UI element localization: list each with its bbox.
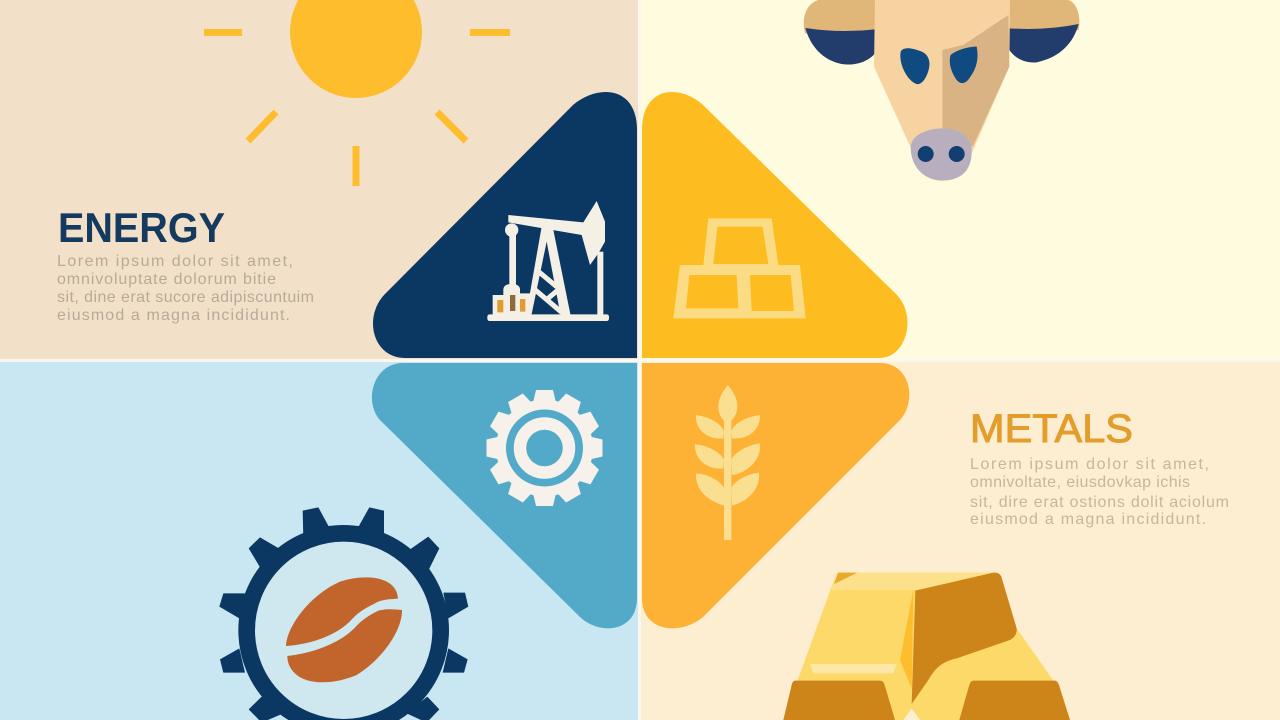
icon: oil pump — [487, 201, 609, 321]
icon: white gear — [486, 390, 602, 506]
heading: metals: METALS — [970, 407, 1133, 451]
panel: navy triangle with oil pump — [373, 92, 637, 358]
icon: outlined gold bars — [673, 218, 806, 318]
text block: metals description: sit, dire erat ostions dolit aciolum — [970, 494, 1229, 511]
panel: energy background — [0, 0, 638, 359]
heading: energy: ENERGY — [58, 204, 225, 251]
gear — [219, 507, 468, 720]
text block: energy description: sit, dine erat sucore adipiscuntuim — [57, 289, 314, 306]
text block: metals description — [970, 456, 1229, 528]
icon: coffee gear — [219, 507, 468, 720]
text block: metals description: eiusmod a magna incididunt. — [970, 511, 1206, 528]
icon: sun — [204, 0, 510, 186]
eyes — [900, 48, 930, 84]
text block: energy description: omnivoluptate dolorum bitie — [57, 271, 276, 288]
panel: livestock background — [641, 0, 1280, 359]
panel: yellow triangle with gold bars — [642, 92, 907, 358]
panel: metals background — [641, 362, 1280, 720]
head — [874, 0, 1010, 153]
coffee bean — [286, 577, 402, 682]
panel: orange triangle with wheat — [642, 363, 909, 628]
text block: energy description: eiusmod a magna incididunt. — [57, 307, 290, 324]
text block: energy description: Lorem ipsum dolor sit amet, — [57, 253, 293, 270]
left ear — [804, 0, 875, 64]
muzzle — [911, 128, 972, 181]
right ear — [1009, 0, 1079, 62]
icon: wheat — [695, 385, 760, 540]
text block: energy description — [57, 253, 314, 324]
text block: metals description: omnivoltate, eiusdovkap ichis — [970, 474, 1190, 491]
text block: metals description: Lorem ipsum dolor sit amet, — [970, 456, 1209, 473]
icon: gold bars — [783, 573, 1070, 720]
panel: industrial background — [0, 362, 638, 720]
panel: blue triangle with gear — [372, 363, 637, 628]
icon: cow head — [804, 0, 1079, 181]
